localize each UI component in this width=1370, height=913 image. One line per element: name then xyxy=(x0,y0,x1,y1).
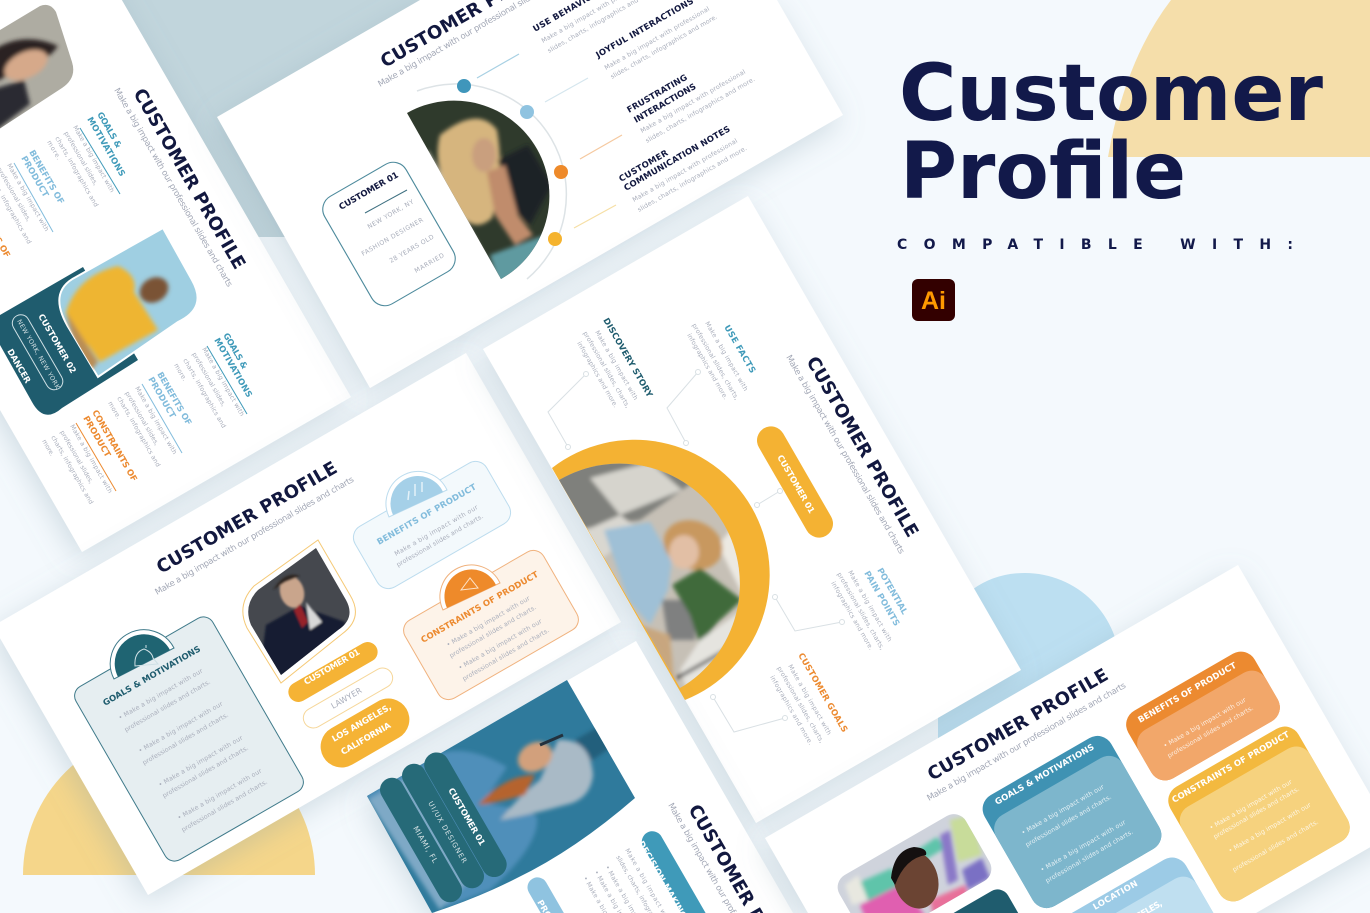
text block: use facts: professional slides, charts, xyxy=(690,322,740,401)
card: location: LOCATION xyxy=(1092,879,1140,913)
pill: location: LOS ANGELES, xyxy=(330,702,394,745)
connector: yellow xyxy=(574,205,616,228)
heading: CUSTOMER PROFILE xyxy=(924,665,1112,785)
card: constraints of product: • Make a big impact with our xyxy=(458,618,544,672)
card: benefits of product xyxy=(1120,646,1286,786)
pill: customer 01: CUSTOMER 01 xyxy=(774,454,816,516)
text block: goals 2: professional slides, xyxy=(190,352,227,408)
card: benefits of product: professional slides and charts. xyxy=(1166,705,1255,760)
card: benefits of product: professional slides and charts. xyxy=(396,513,485,569)
card: goals and motivations: GOALS & MOTIVATIONS xyxy=(102,644,203,709)
text block: customer goals: Make a big impact with xyxy=(786,664,832,736)
pill: teal name card xyxy=(933,885,1032,913)
heading: CUSTOMER PROFILE xyxy=(129,85,249,273)
connector: pain points xyxy=(772,594,844,631)
pill: decision making xyxy=(635,827,711,913)
text block: potential pain points: professional slides, charts, xyxy=(835,572,885,651)
text block: benefits 2: more. xyxy=(106,400,122,420)
text block: benefits 2: BENEFITS OF xyxy=(154,370,193,428)
text block: customer goals xyxy=(768,652,849,746)
title: Customer Profile xyxy=(899,49,1324,217)
photo: woman in hood xyxy=(367,680,635,913)
connector: light blue xyxy=(545,78,588,102)
subtitle: Make a big impact with our professional slides and charts xyxy=(111,86,234,289)
card: goals and motivations: • Make a big impact with our xyxy=(1020,783,1106,837)
slide: customer 01 half circle (centre) xyxy=(483,196,1021,823)
text block: goals 2: Make a big impact with xyxy=(200,346,245,418)
text block: constraints 2: Make a big impact with xyxy=(68,424,113,495)
text block: goals 2 xyxy=(172,332,254,429)
arc timeline xyxy=(417,84,566,279)
text block: discovery story: Make a big impact with xyxy=(593,330,639,401)
bar: designer xyxy=(398,759,488,893)
bar: city xyxy=(376,773,466,907)
bar: customer 01: CUSTOMER 01 xyxy=(445,786,487,848)
text block: benefits 2: Make a big impact with xyxy=(133,386,178,456)
text block: discovery story: infographics and more. xyxy=(575,340,619,409)
card: goals and motivations: GOALS & MOTIVATIONS xyxy=(994,742,1096,808)
card: constraints of product: • Make a big impact with our xyxy=(1228,801,1313,855)
icon: chart half circle xyxy=(386,472,447,517)
text block: goals 1: professional slides, xyxy=(62,130,99,187)
connector: orange xyxy=(580,135,622,159)
card: goals and motivations: • Make a big impact with our xyxy=(118,667,204,722)
card: customer 01 details: CUSTOMER 01 xyxy=(338,170,401,213)
card: constraints of product: professional slides and charts. xyxy=(1212,786,1301,841)
text block: potential pain points xyxy=(829,566,909,652)
connector: customer goals xyxy=(710,694,788,732)
ring: yellow half circle xyxy=(552,440,770,700)
text block: discovery story: professional slides, charts, xyxy=(581,330,631,409)
photo: blonde woman half circle xyxy=(407,100,550,279)
label: customer 02: CUSTOMER 02 xyxy=(35,312,78,376)
text block: frustrating interactions: FRUSTRATING xyxy=(626,73,689,116)
icon: rocket half circle xyxy=(440,565,500,610)
text block: constraints 2: professional slides, xyxy=(58,430,94,485)
bar: city: MIAMI, FL xyxy=(411,824,440,865)
slide: customer 02 (top left) xyxy=(0,0,351,552)
connector: blue xyxy=(477,54,519,78)
text block: benefits 2: PRODUCT xyxy=(145,376,177,420)
card: goals and motivations: professional slides and charts. xyxy=(180,779,269,834)
text block: goals 1: more. xyxy=(45,140,62,161)
card: location xyxy=(1055,852,1239,913)
pill: location: CALIFORNIA xyxy=(340,721,393,758)
text block: frustrating interactions: Make a big impact with professional xyxy=(640,69,747,135)
text block: goals 1: charts, infographics and xyxy=(53,136,99,208)
bar: customer 01 xyxy=(420,748,511,882)
bar: designer: UI/UX DESIGNER xyxy=(426,800,468,865)
dot: light blue xyxy=(520,105,534,119)
text block: constraints 2: CONSTRAINTS OF xyxy=(89,408,139,484)
photo: woman with plant xyxy=(559,464,740,688)
card: constraints of product xyxy=(1162,721,1356,907)
card: goals and motivations xyxy=(71,613,307,865)
card: goals and motivations: professional slides and charts. xyxy=(142,712,230,767)
card: customer 01 details xyxy=(317,157,461,311)
card: customer 01 details: FASHION DESIGNER xyxy=(360,216,425,258)
pill: lawyer: LAWYER xyxy=(330,686,364,711)
text block: communication notes: CUSTOMER xyxy=(618,148,671,185)
pill: customer 01 xyxy=(285,638,381,706)
text block: discovery story: DISCOVERY STORY xyxy=(600,316,654,400)
pill: location xyxy=(313,691,417,775)
card: customer 01 details: MARRIED xyxy=(414,252,446,275)
heading: CUSTOMER PROFILE xyxy=(153,458,341,578)
card: customer 01 details: 28 YEARS OLD xyxy=(388,234,435,265)
text block: potential pain points: Make a big impact with xyxy=(846,570,893,643)
text block: frustrating interactions: slides, charts, infographics and more. xyxy=(644,76,756,145)
text block: benefits 2: charts, infographics and xyxy=(115,396,161,468)
connector: customer pill xyxy=(754,488,782,508)
icon: illustrator xyxy=(912,279,955,321)
dot: orange xyxy=(554,165,568,179)
text block: goals 2: GOALS & xyxy=(220,332,249,372)
text block: goals 1: GOALS & xyxy=(94,110,123,151)
subtitle: Make a big impact with our professional slides and charts xyxy=(154,475,356,598)
card: benefits of product: Make a big impact with our xyxy=(394,504,480,558)
text block: benefits 2: professional slides, xyxy=(123,390,160,447)
slide: customer 01 fashion designer (top) xyxy=(217,0,843,388)
blob: yellow half circle bottom left xyxy=(23,729,315,875)
blob: blue half circle bottom right xyxy=(938,573,1120,740)
text block: joyful interactions: Make a big impact with professional xyxy=(604,6,711,72)
card: goals and motivations: • Make a big impact with our xyxy=(1040,819,1127,874)
pill: customer 01: CUSTOMER 01 xyxy=(302,647,362,688)
text block: goals 1 xyxy=(45,110,127,208)
connector: discovery xyxy=(548,372,588,450)
text block: goals 2: charts, infographics and xyxy=(181,358,227,429)
label: compatible with: COMPATIBLE WITH: xyxy=(897,237,1293,253)
text block: use facts: Make a big impact with xyxy=(703,320,749,392)
text block: customer goals: infographics and more. xyxy=(768,674,814,746)
blob: slate half circle xyxy=(100,0,500,237)
card: constraints of product: • Make a big impact with our xyxy=(446,595,532,649)
text block: benefits 1: PRODUCT xyxy=(18,154,50,199)
photo: man in suit xyxy=(240,540,360,683)
card: goals and motivations: professional slides and charts. xyxy=(1044,829,1135,885)
title: Customer Profile: Profile xyxy=(900,127,1186,217)
card: goals and motivations: • Make a big impact with our xyxy=(138,700,224,755)
blob: yellow half circle top right xyxy=(1108,0,1370,157)
text block: communication notes: Make a big impact with professional xyxy=(632,138,739,204)
card: benefits of product: • Make a big impact with our xyxy=(1162,696,1248,750)
card: goals and motivations: • Make a big impact with our xyxy=(158,734,244,789)
icon: illustrator: Ai xyxy=(921,287,946,315)
text block: potential pain points: infographics and more. xyxy=(829,580,874,652)
title: Customer Profile: Customer xyxy=(899,49,1324,139)
text block: use facts: USE FACTS xyxy=(721,324,757,375)
subtitle: Make a big impact with our professional slides and charts xyxy=(783,354,906,556)
text block: use facts xyxy=(685,320,757,401)
card: constraints of product xyxy=(399,546,583,704)
photo: laughing woman xyxy=(0,4,74,128)
text block: frustrating interactions: INTERACTIONS xyxy=(632,82,698,126)
label: dancer: DANCER xyxy=(4,348,32,386)
text block: communication notes: COMMUNICATION NOTES xyxy=(622,124,732,194)
icon: bell half circle xyxy=(110,630,174,679)
text block: constraints 2: more. xyxy=(40,438,55,458)
text block: benefits 1: Make a big impact with xyxy=(5,162,50,233)
text block: constraints 2 xyxy=(40,408,139,506)
text block: goals 2: MOTIVATIONS xyxy=(211,336,254,400)
text block: benefits 1: BENEFITS OF xyxy=(26,148,66,206)
text block: potential pain points: PAIN POINTS xyxy=(861,570,901,628)
card: goals and motivations: professional slides and charts. xyxy=(162,745,250,800)
text block: customer goals: CUSTOMER GOALS xyxy=(795,652,849,734)
card: customer 01 details: NEW YORK, NY xyxy=(366,199,415,231)
card: goals and motivations xyxy=(977,730,1167,913)
text block: goals 1: Make a big impact with xyxy=(71,124,115,194)
card: benefits of product xyxy=(349,457,515,593)
slide: customer 01 lawyer (bottom left) xyxy=(0,353,621,895)
text block: communication notes xyxy=(618,124,748,214)
heading: CUSTOMER PROFILE xyxy=(802,353,922,541)
text block: use facts: infographics and more. xyxy=(685,332,729,401)
pill: city: NEW YORK, NEW YORK xyxy=(15,318,61,391)
card: benefits of product: BENEFITS OF PRODUCT xyxy=(1136,661,1239,726)
dot: yellow xyxy=(548,232,562,246)
pill: lawyer xyxy=(300,664,396,732)
card: constraints of product: • Make a big impact with our xyxy=(1208,778,1294,832)
card: benefits of product: BENEFITS OF PRODUCT xyxy=(376,482,479,548)
card: customer 02 teal xyxy=(0,267,138,415)
text block: constraints 2: charts, infographics and xyxy=(49,434,94,506)
dot: blue xyxy=(457,79,471,93)
text block: customer goals: professional slides, charts, xyxy=(775,666,825,744)
text block: joyful interactions: slides, charts, infographics and more. xyxy=(610,14,719,81)
subtitle: Make a big impact with our professional slides and charts xyxy=(926,681,1128,804)
text block: benefits 1 xyxy=(0,148,66,245)
connector: use facts xyxy=(667,370,700,446)
text block: goals 2: more. xyxy=(172,362,188,382)
photo: man with graffiti xyxy=(838,814,992,913)
card: goals and motivations: professional slides and charts. xyxy=(124,679,212,734)
card: constraints of product: professional slides and charts. xyxy=(1232,819,1320,874)
slide: ui ux designer (bottom middle) xyxy=(360,641,804,913)
pill: product xyxy=(524,874,576,913)
card: constraints of product: CONSTRAINTS OF PRODUCT xyxy=(420,570,541,646)
text block: constraints 2: PRODUCT xyxy=(80,414,112,459)
photo: woman in yellow jacket xyxy=(59,228,198,377)
text block: benefits 2 xyxy=(106,370,193,468)
card: constraints of product: professional slides and charts. xyxy=(448,604,538,660)
card: goals and motivations: professional slides and charts. xyxy=(1024,794,1113,849)
text block: potential pain points: POTENTIAL xyxy=(874,566,909,617)
card: constraints of product: professional slides and charts. xyxy=(462,627,551,683)
text block: goals 1: MOTIVATIONS xyxy=(84,116,127,179)
text block: decision bullets xyxy=(581,848,672,913)
slide: coloured cards (bottom right) xyxy=(765,565,1370,913)
text block: communication notes: slides, charts, infographics and more. xyxy=(636,145,748,214)
text block: discovery story xyxy=(575,316,654,409)
card: goals and motivations: • Make a big impact with our xyxy=(176,767,263,822)
card: constraints of product: CONSTRAINTS OF PRODUCT xyxy=(1170,730,1292,806)
pill: customer 01 xyxy=(752,421,838,543)
